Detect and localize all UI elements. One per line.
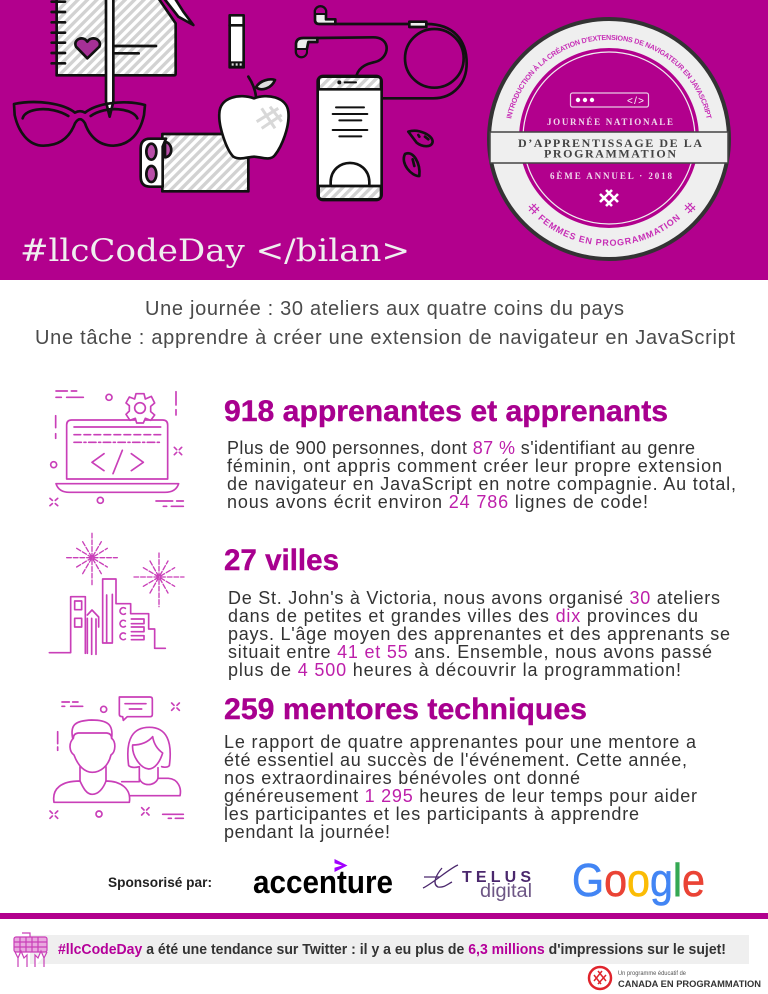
text block: learners: nous avons écrit environ 24 786 lignes de code! — [227, 492, 648, 512]
purple divider — [0, 913, 768, 919]
text block: cities: plus de 4 500 heures à découvrir la programmation! — [228, 660, 681, 680]
badge top ring text: INTRODUCTION À LA CRÉATION D'EXTENSIONS DE NAVIGATEUR EN JAVASCRIPT — [506, 34, 712, 118]
badge — [487, 17, 731, 261]
icon: notebook — [52, 0, 176, 75]
text block: learners — [227, 438, 736, 512]
logo: telus digital: TELUS — [462, 869, 531, 886]
logo: canada en programmation: CANADA EN PROGRAMMATION — [618, 979, 761, 989]
badge ribbon: PROGRAMMATION — [544, 146, 676, 160]
intro text: Une tâche : apprendre à créer une extension de navigateur en JavaScript — [35, 327, 735, 349]
icon: laptop — [50, 391, 183, 506]
text block: cities: dans de petites et grandes villes des dix provinces du — [228, 606, 698, 626]
icon: tablet and camera — [141, 134, 248, 191]
heading: cities: 27 villes — [224, 544, 339, 577]
text block: mentors: Le rapport de quatre apprenantes pour une mentore a — [224, 732, 697, 752]
text block: learners: Plus de 900 personnes, dont 87 % s'identifiant au genre — [227, 438, 695, 458]
logo: accenture: accenture — [253, 864, 393, 900]
header illustrations — [14, 0, 467, 200]
badge ribbon — [490, 132, 728, 163]
badge text: annual: 6ÈME ANNUEL · 2018 — [550, 171, 672, 181]
badge right star — [685, 203, 695, 213]
title: #llcCodeDay </bilan> — [20, 233, 410, 269]
badge text: journée nationale: JOURNÉE NATIONALE — [547, 117, 673, 127]
intro text: Une journée : 30 ateliers aux quatre coins du pays — [145, 298, 624, 320]
badge bottom ring text: FEMMES EN PROGRAMMATION — [538, 214, 680, 246]
text block: learners: féminin, ont appris comment créer leur propre extension — [227, 456, 722, 476]
badge logo mark — [600, 190, 618, 206]
icon: USB key — [230, 15, 244, 67]
logo: telus digital: digital — [480, 881, 532, 902]
icon: mentors — [50, 697, 183, 818]
text block: cities — [228, 588, 730, 680]
heading: learners: 918 apprenantes et apprenants — [224, 395, 668, 428]
intro text — [35, 298, 735, 349]
icon: glasses — [14, 102, 145, 146]
text block: mentors: nos extraordinaires bénévoles ont donné — [224, 768, 580, 788]
text block: mentors: généreusement 1 295 heures de leur temps pour aider — [224, 786, 697, 806]
logo: canada en programmation: Un programme éducatif de — [618, 970, 686, 977]
heading: mentors: 259 mentores techniques — [224, 693, 587, 726]
sponsors label: Sponsorisé par: — [108, 875, 212, 890]
icon: pencil — [106, 0, 193, 117]
badge browser icon: </> — [627, 96, 644, 107]
icon: apple — [219, 77, 289, 158]
logo: canada en programmation — [589, 967, 761, 989]
text block: cities: situait entre 41 et 55 ans. Ensemble, nous avons passé — [228, 642, 712, 662]
logo: google: Google — [572, 854, 705, 906]
text block: mentors: pendant la journée! — [224, 822, 390, 842]
callout text: #llcCodeDay a été une tendance sur Twitter : il y a eu plus de 6,3 millions d'impressions sur le sujet! — [58, 942, 726, 958]
icon: smartphone — [318, 76, 382, 200]
header banner — [0, 0, 768, 280]
text block: mentors: été essentiel au succès de l'événement. Cette année, — [224, 750, 687, 770]
badge left star — [529, 204, 539, 214]
icon: earphones cable — [296, 6, 467, 98]
text block: cities: De St. John's à Victoria, nous avons organisé 30 ateliers — [228, 588, 720, 608]
logo: telus digital — [423, 865, 532, 902]
text block: mentors: les participantes et les participants à apprendre — [224, 804, 639, 824]
text block: cities: pays. L'âge moyen des apprenantes et des apprenants se — [228, 624, 730, 644]
icon: keyboard and hands — [14, 933, 47, 967]
badge ribbon: D’APPRENTISSAGE DE LA — [518, 136, 702, 150]
text block: mentors — [224, 732, 697, 842]
icon: apple seeds — [404, 131, 433, 176]
icon: city and fireworks — [49, 533, 184, 654]
text block: learners: de navigateur en JavaScript en notre compagnie. Au total, — [227, 474, 736, 494]
callout: twitter — [30, 935, 749, 964]
badge browser icon — [570, 93, 648, 107]
